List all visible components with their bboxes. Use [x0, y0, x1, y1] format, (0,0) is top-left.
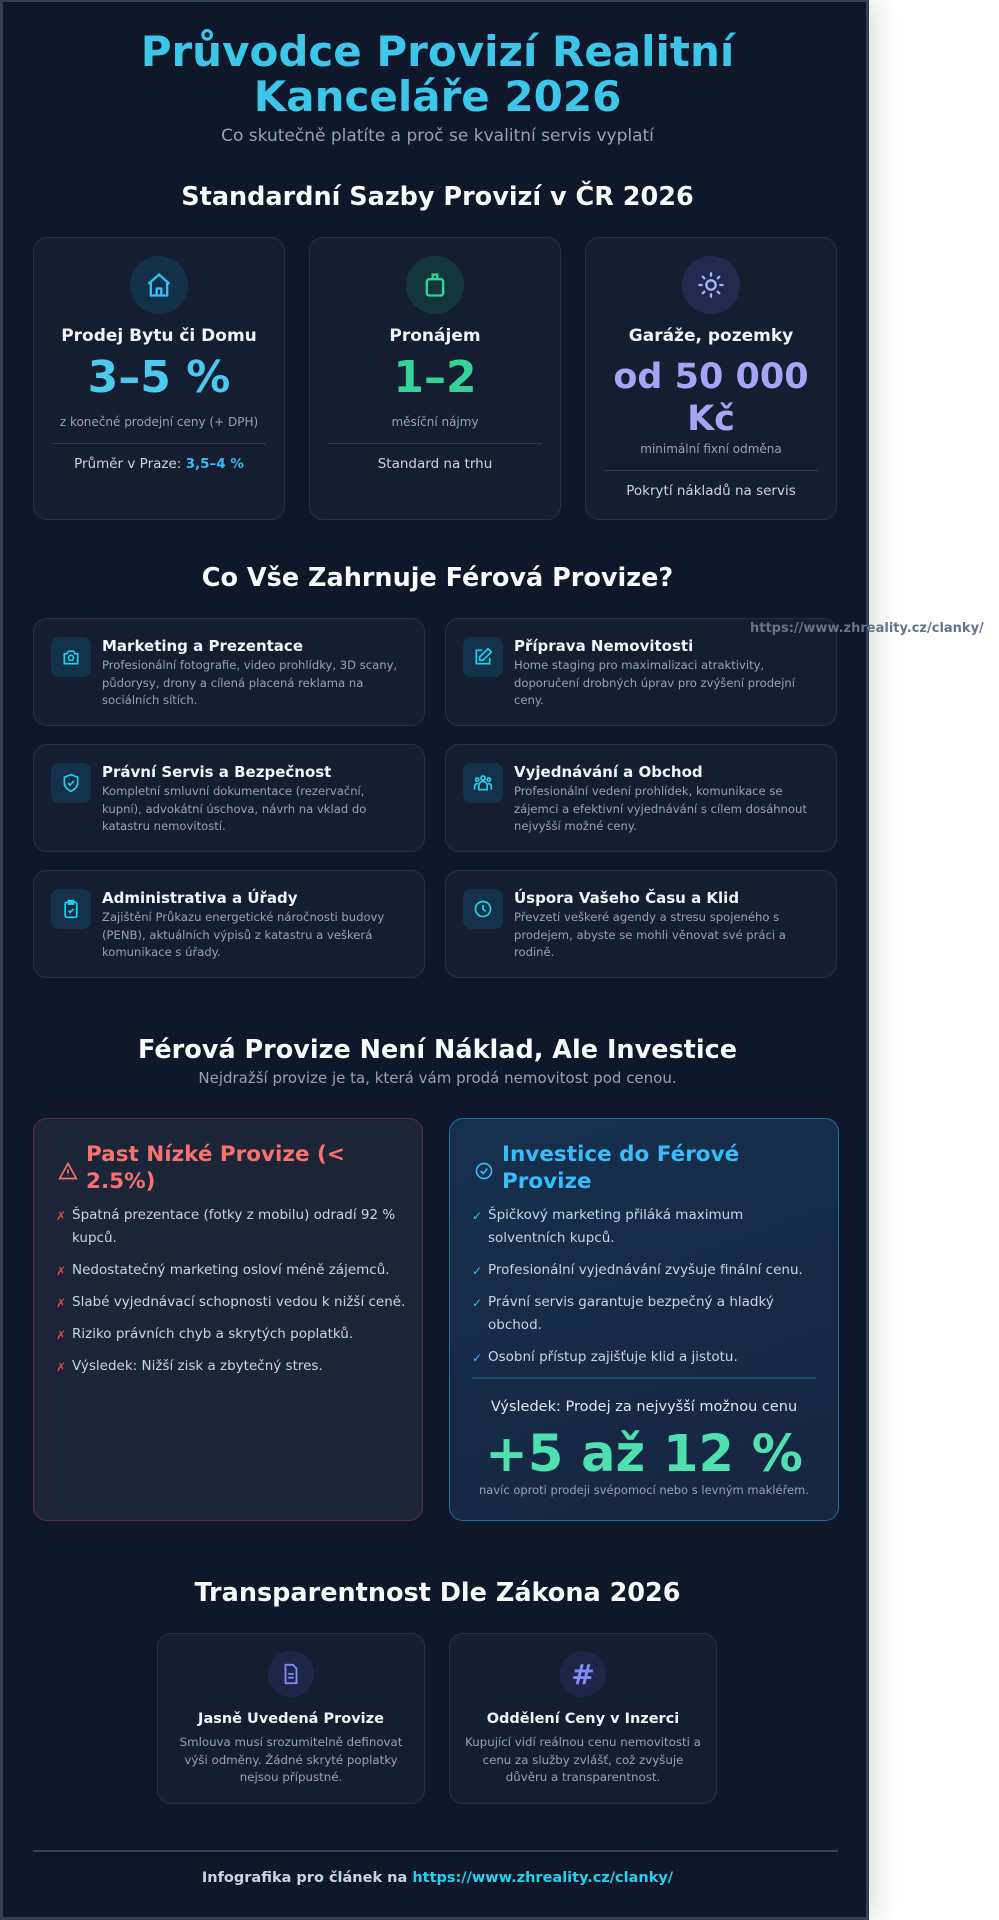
subheading: Nejdražší provize je ta, která vám prodá nemovitost pod cenou.: [198, 1069, 677, 1087]
title: Oddělení Ceny v Inzerci: [487, 1711, 679, 1727]
icon: sun: [682, 256, 740, 314]
list of risks: Výsledek: Nižší zisk a zbytečný stres.: [72, 1358, 323, 1374]
result statement: Výsledek: Prodej za nejvyšší možnou cenu: [491, 1399, 797, 1415]
value: [613, 357, 809, 439]
feature: preparation: [445, 618, 837, 726]
list of benefits: Právní servis garantuje bezpečný a hladký obchod.: [488, 1294, 774, 1333]
card title: Garáže, pozemky: [629, 326, 793, 346]
value: od 50 000: [613, 357, 809, 397]
big result number: +5 až 12 %: [485, 1425, 803, 1484]
icon: clipboard: [51, 889, 91, 929]
caption: měsíční nájmy: [391, 415, 479, 429]
description: Kupující vidí reálnou cenu nemovitosti a cenu za služby zvlášť, což zvyšuje důvěru a transparentnost.: [465, 1735, 701, 1784]
icon: bag: [406, 256, 464, 314]
description: Smlouva musí srozumitelně definovat výši odměny. Žádné skryté poplatky nejsou přípustné.: [180, 1735, 402, 1784]
icon: shield: [51, 763, 91, 803]
feature: marketing: [33, 618, 425, 726]
title: Jasně Uvedená Provize: [198, 1711, 384, 1727]
footer note: Pokrytí nákladů na servis: [626, 483, 796, 499]
list of benefits: Špičkový marketing přiláká maximum solventních kupců.: [488, 1207, 743, 1246]
caption: z konečné prodejní ceny (+ DPH): [60, 415, 258, 429]
heading: what is included: Co Vše Zahrnuje Férová Provize?: [202, 563, 673, 593]
heading with warning icon: Past Nízké Provize (< 2.5%): [86, 1142, 345, 1194]
panel: fair commission investment: [449, 1118, 839, 1521]
title: [141, 27, 736, 121]
list of benefits: Profesionální vyjednávání zvyšuje finální cenu.: [488, 1262, 803, 1278]
card: sale: [33, 237, 285, 520]
list of risks: [56, 1206, 405, 1374]
description: Převzetí veškeré agendy a stresu spojeného s prodejem, abyste se mohli věnovat své práci a rodině.: [514, 910, 786, 959]
list of risks: Nedostatečný marketing osloví méně zájemců.: [72, 1262, 390, 1278]
card: clear commission: [157, 1633, 425, 1804]
list of benefits: [472, 1206, 803, 1365]
list of benefits: ✓: [472, 1296, 482, 1310]
icon: hash: #: [571, 1658, 595, 1690]
icon: camera: [51, 637, 91, 677]
title: Administrativa a Úřady: [102, 889, 298, 907]
list of risks: Slabé vyjednávací schopnosti vedou k nižší ceně.: [72, 1294, 405, 1310]
list of benefits: Osobní přístup zajišťuje klid a jistotu.: [488, 1349, 738, 1365]
heading: investment: Férová Provize Není Náklad, Ale Investice: [138, 1035, 737, 1065]
card: price separation: [449, 1633, 717, 1804]
description: Zajištění Průkazu energetické náročnosti budovy (PENB), aktuálních výpisů z katastru a veškerá komunikace s úřady.: [102, 910, 384, 959]
value: 1–2: [393, 352, 477, 403]
card: garages: [585, 237, 837, 520]
title: Příprava Nemovitosti: [514, 637, 693, 655]
description: Profesionální vedení prohlídek, komunikace se zájemci a efektivní vyjednávání s cílem dosáhnout nejvyšší možné ceny.: [514, 784, 807, 833]
list of risks: Riziko právních chyb a skrytých poplatků.: [72, 1326, 353, 1342]
list of benefits: ✓: [472, 1264, 482, 1278]
card title: Pronájem: [389, 326, 481, 346]
caption: minimální fixní odměna: [640, 442, 782, 456]
icon: hash: [560, 1651, 606, 1697]
list of risks: ✗: [56, 1328, 66, 1342]
title: Kanceláře 2026: [254, 72, 621, 121]
footer note: Průměr v Praze: 3,5–4 %: [74, 456, 244, 472]
list of benefits: ✓: [472, 1209, 482, 1223]
list of risks: Špatná prezentace (fotky z mobilu) odradí 92 % kupců.: [72, 1207, 395, 1246]
heading with check icon: Investice do Férové Provize: [502, 1142, 739, 1194]
icon: people: [463, 763, 503, 803]
icon: clock: [463, 889, 503, 929]
card: rent: [309, 237, 561, 520]
icon: document: [268, 1651, 314, 1697]
value: Kč: [687, 399, 735, 439]
list of risks: ✗: [56, 1296, 66, 1310]
title: Vyjednávání a Obchod: [514, 763, 703, 781]
feature: time saving: [445, 870, 837, 978]
footer: Infografika pro článek na https://www.zhreality.cz/clanky/: [202, 1870, 673, 1886]
list of risks: ✗: [56, 1209, 66, 1223]
value: 3–5 %: [88, 352, 230, 403]
footer note: Standard na trhu: [378, 456, 492, 472]
feature: negotiation: [445, 744, 837, 852]
description: Home staging pro maximalizaci atraktivity, doporučení drobných úprav pro zvýšení prodejní ceny.: [514, 658, 795, 707]
card title: Prodej Bytu či Domu: [61, 326, 257, 346]
title: Marketing a Prezentace: [102, 637, 303, 655]
title: Průvodce Provizí Realitní: [141, 27, 734, 76]
panel: low commission trap: [33, 1118, 423, 1521]
subtitle: Co skutečně platíte a proč se kvalitní servis vyplatí: [221, 126, 654, 146]
icon: edit: [463, 637, 503, 677]
title: Právní Servis a Bezpečnost: [102, 763, 331, 781]
icon: house: [130, 256, 188, 314]
list of risks: ✗: [56, 1264, 66, 1278]
watermark url: https://www.zhreality.cz/clanky/: [750, 621, 984, 636]
list of risks: ✗: [56, 1360, 66, 1374]
description: Kompletní smluvní dokumentace (rezervační, kupní), advokátní úschova, návrh na vklad do katastru nemovitostí.: [102, 784, 366, 833]
heading: transparency: Transparentnost Dle Zákona 2026: [194, 1578, 681, 1608]
title: Úspora Vašeho Času a Klid: [514, 889, 739, 907]
heading: standard rates: Standardní Sazby Provizí v ČR 2026: [181, 182, 694, 212]
result caption: navíc oproti prodeji svépomocí nebo s levným makléřem.: [479, 1483, 809, 1497]
feature: legal: [33, 744, 425, 852]
list of benefits: ✓: [472, 1351, 482, 1365]
feature: administration: [33, 870, 425, 978]
description: Profesionální fotografie, video prohlídky, 3D scany, půdorysy, drony a cílená placená reklama na sociálních sítích.: [102, 658, 397, 707]
